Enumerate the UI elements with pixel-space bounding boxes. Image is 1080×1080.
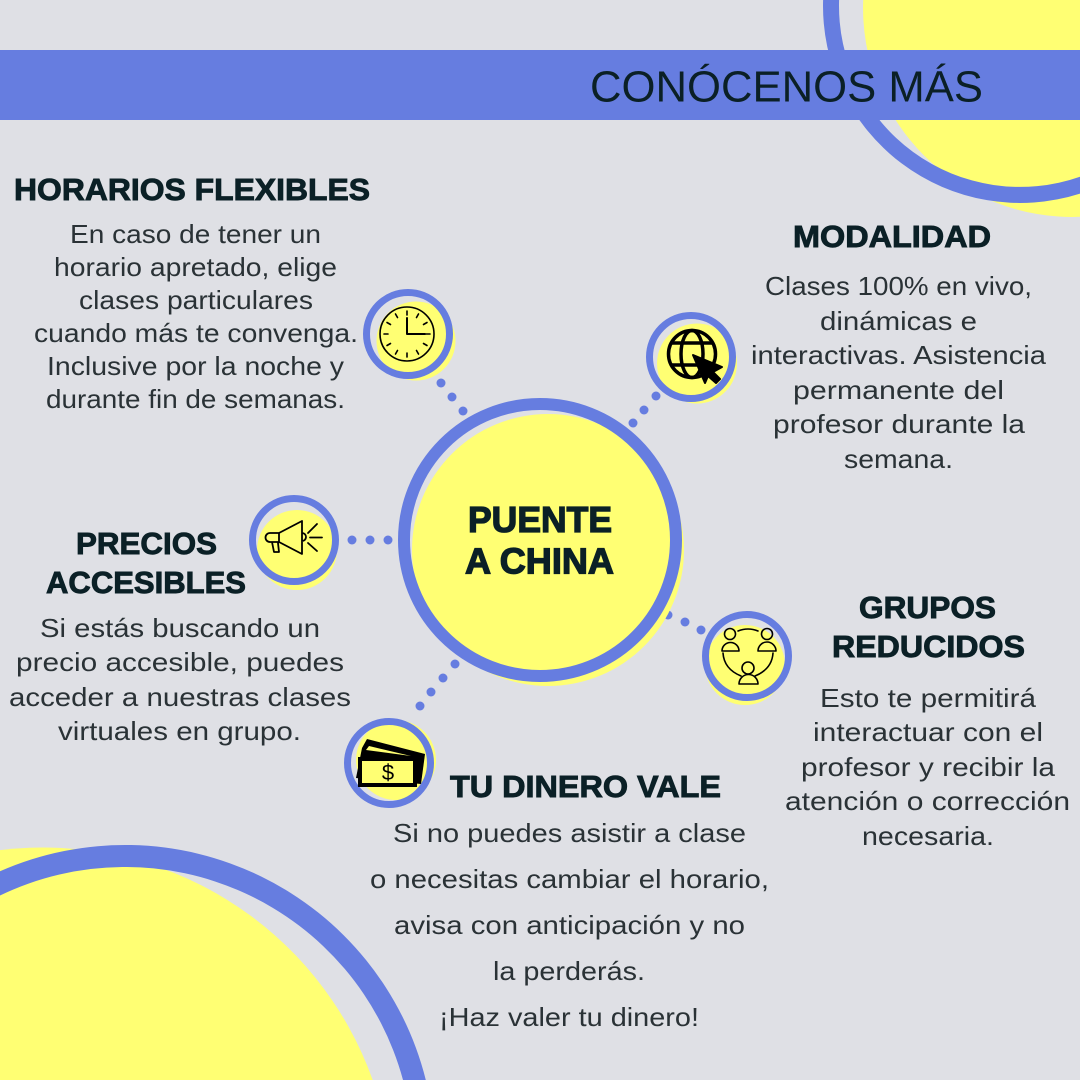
central hub: Puente a China <box>404 404 684 686</box>
heading: TU DINERO VALE <box>450 769 721 804</box>
body text: permanente del <box>793 375 1004 405</box>
body text <box>9 613 351 746</box>
body text: durante fin de semanas. <box>46 384 345 414</box>
header band <box>0 50 1080 120</box>
heading: PRECIOS <box>76 526 217 561</box>
central hub: Puente a China: PUENTE <box>468 499 612 540</box>
heading: MODALIDAD <box>793 219 991 254</box>
body text: profesor y recibir la <box>801 752 1056 782</box>
body text: Esto te permitirá <box>820 683 1037 713</box>
section: modalidad <box>751 219 1047 474</box>
body text <box>370 818 769 1032</box>
heading: GRUPOS <box>859 590 996 625</box>
section: horarios flexibles <box>14 172 370 414</box>
body text <box>751 271 1047 474</box>
body text: cuando más te convenga. <box>34 318 358 348</box>
heading: REDUCIDOS <box>832 629 1025 664</box>
body text: precio accesible, puedes <box>16 647 344 677</box>
icon: clock <box>366 292 456 380</box>
body text <box>785 683 1070 851</box>
body text: acceder a nuestras clases <box>9 682 351 712</box>
heading: ACCESIBLES <box>46 565 246 600</box>
body text: clases particulares <box>79 285 313 315</box>
body text: la perderás. <box>493 956 645 986</box>
body text: interactivas. Asistencia <box>751 340 1047 370</box>
body text: Clases 100% en vivo, <box>765 271 1032 301</box>
section: tu dinero vale <box>370 769 769 1032</box>
body text: En caso de tener un <box>70 219 321 249</box>
body text: Si no puedes asistir a clase <box>393 818 746 848</box>
body text: avisa con anticipación y no <box>394 910 745 940</box>
section: precios accesibles <box>9 526 351 746</box>
decoration: bottom left circle <box>0 845 426 1080</box>
connector dots <box>348 378 706 710</box>
body text: dinámicas e <box>820 306 977 336</box>
body text: horario apretado, elige <box>54 252 337 282</box>
body text: interactuar con el <box>813 717 1043 747</box>
body text: atención o corrección <box>785 786 1070 816</box>
icon: banknotes: $ <box>382 760 394 785</box>
body text: necesaria. <box>862 821 994 851</box>
central hub: Puente a China: A CHINA <box>465 540 614 582</box>
icon: people group <box>705 614 788 705</box>
body text: virtuales en grupo. <box>58 716 301 746</box>
heading <box>46 526 246 600</box>
body text: Inclusive por la noche y <box>47 351 344 381</box>
body text: profesor durante la <box>773 409 1026 439</box>
title: CONÓCENOS MÁS <box>590 62 983 112</box>
icon: megaphone <box>252 498 337 590</box>
body text: Si estás buscando un <box>40 613 320 643</box>
body text: ¡Haz valer tu dinero! <box>439 1002 699 1032</box>
heading: HORARIOS FLEXIBLES <box>14 172 370 207</box>
body text: semana. <box>844 444 953 474</box>
icon: banknotes <box>348 720 436 804</box>
heading <box>832 590 1025 664</box>
body text: o necesitas cambiar el horario, <box>370 864 769 894</box>
section: grupos reducidos <box>785 590 1070 851</box>
decoration: top right circle <box>823 0 1080 217</box>
icon: globe with cursor <box>650 316 737 404</box>
body text <box>34 219 358 414</box>
